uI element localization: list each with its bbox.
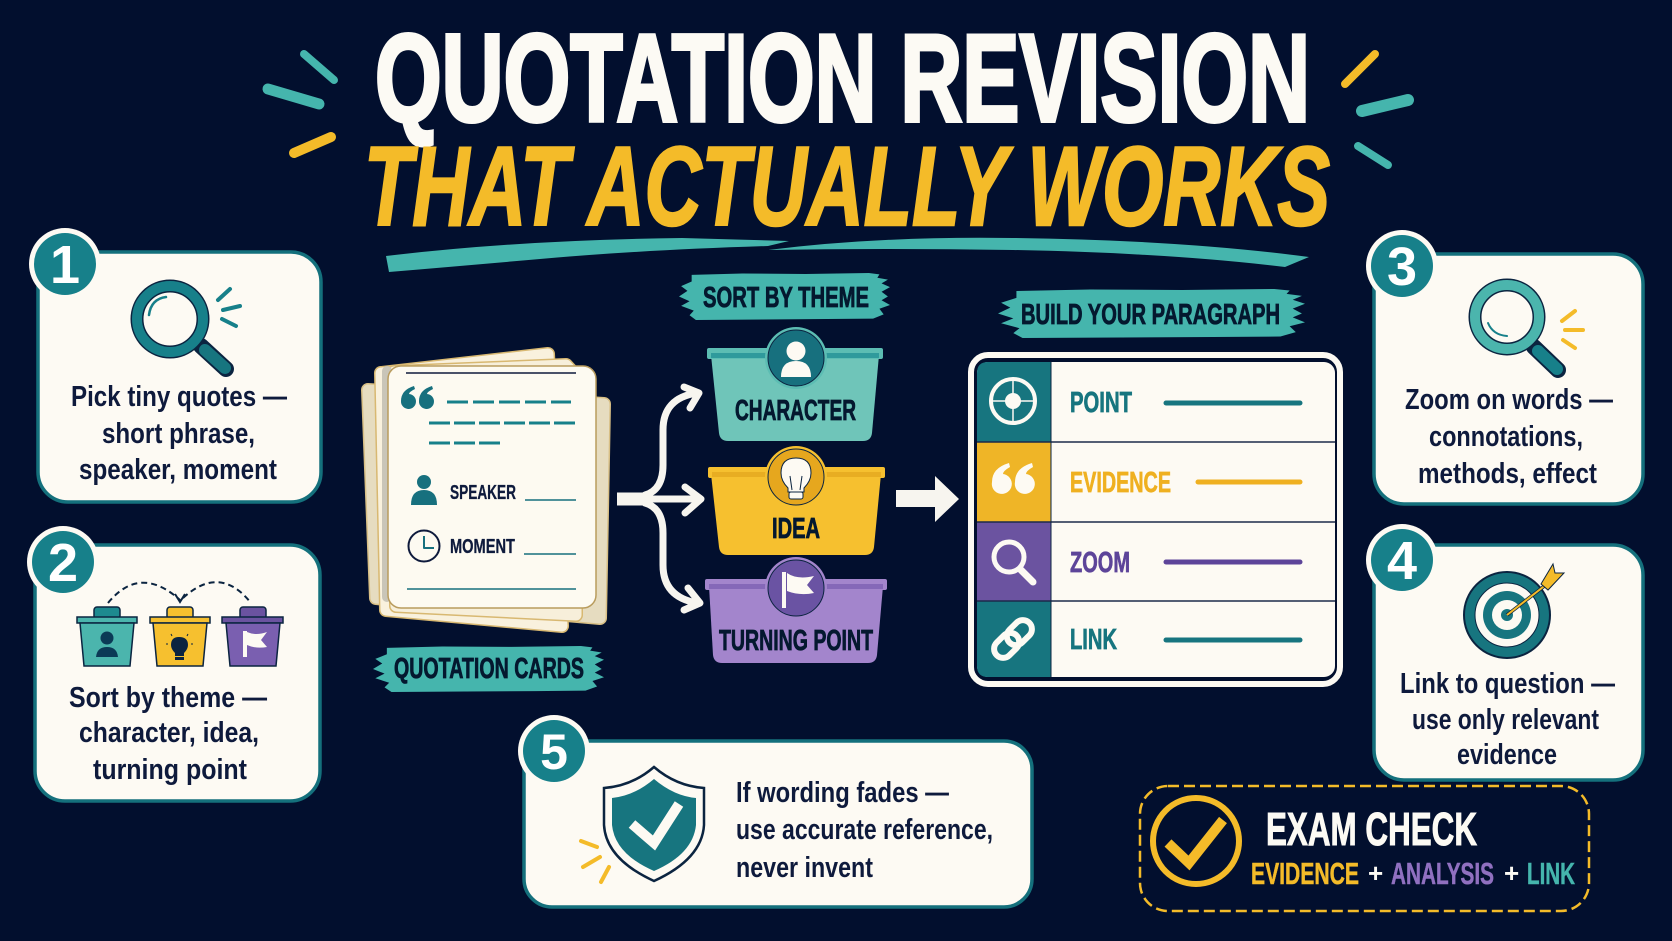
panel: step 1 bbox=[29, 228, 321, 502]
step 4 text: Link to question — bbox=[1400, 668, 1615, 700]
title bbox=[364, 10, 1330, 249]
speaker row bbox=[411, 475, 576, 505]
title underline swoosh bbox=[386, 238, 1309, 272]
row: link: LINK bbox=[1070, 624, 1117, 656]
exam formula: + bbox=[1504, 858, 1519, 888]
step 1 text bbox=[71, 381, 287, 486]
icon: zoom lens bbox=[994, 542, 1033, 582]
step 3 text: methods, effect bbox=[1418, 458, 1597, 490]
icon: target with arrow bbox=[1464, 564, 1564, 658]
moment row bbox=[408, 530, 576, 562]
callout: exam check: EXAM CHECK bbox=[1266, 803, 1477, 855]
exam formula: EVIDENCE bbox=[1251, 856, 1359, 891]
title accent marks bbox=[268, 54, 1408, 165]
badge 1: 1 bbox=[50, 235, 80, 295]
bin: turning point bbox=[705, 557, 887, 663]
label: quotation cards: QUOTATION CARDS bbox=[394, 653, 584, 685]
label: sort by theme: SORT BY THEME bbox=[703, 282, 869, 314]
row: evidence bbox=[977, 442, 1300, 522]
step 2 text: turning point bbox=[93, 754, 247, 786]
bin: idea bbox=[708, 446, 885, 555]
label: build your paragraph: BUILD YOUR PARAGRAPH bbox=[1021, 299, 1280, 331]
icon: chain link bbox=[990, 616, 1036, 662]
step 2 text: character, idea, bbox=[79, 717, 259, 749]
bin: idea: IDEA bbox=[772, 513, 820, 545]
icon: magnifying glass teal bbox=[1475, 285, 1583, 370]
step 4 text bbox=[1400, 668, 1615, 771]
row: point bbox=[977, 362, 1300, 442]
step 1 text: speaker, moment bbox=[79, 454, 277, 486]
exam formula bbox=[1251, 856, 1575, 891]
icon: crosshair bbox=[991, 379, 1035, 423]
row: zoom: ZOOM bbox=[1070, 547, 1130, 579]
badge 2: 2 bbox=[48, 533, 78, 593]
step 5 text: If wording fades — bbox=[736, 777, 949, 809]
badge 4: 4 bbox=[1387, 531, 1417, 591]
step 1 text: Pick tiny quotes — bbox=[71, 381, 287, 413]
row: link bbox=[977, 601, 1300, 677]
moment row: MOMENT bbox=[450, 536, 515, 558]
exam formula: LINK bbox=[1527, 856, 1575, 891]
exam formula: + bbox=[1368, 858, 1383, 888]
icon: quote marks bbox=[992, 463, 1035, 494]
row: evidence: EVIDENCE bbox=[1070, 467, 1171, 499]
panel: step 5 bbox=[518, 715, 1032, 907]
step 1 text: short phrase, bbox=[102, 418, 255, 450]
step 3 text: Zoom on words — bbox=[1405, 384, 1613, 416]
icon: flag badge bbox=[765, 557, 827, 619]
icon: light bulb badge bbox=[765, 446, 827, 508]
arrow: to paragraph bbox=[896, 476, 959, 522]
icon: shield with check bbox=[581, 767, 704, 882]
exam formula: ANALYSIS bbox=[1391, 856, 1494, 891]
step 2 text bbox=[69, 682, 267, 786]
icon: quote mark bbox=[401, 386, 434, 409]
icon: person badge bbox=[765, 327, 827, 389]
panel: step 4 bbox=[1366, 524, 1643, 780]
row: zoom bbox=[977, 522, 1300, 601]
step 2 text: Sort by theme — bbox=[69, 682, 267, 714]
icon: check circle bbox=[1153, 798, 1239, 884]
badge 3: 3 bbox=[1387, 237, 1417, 297]
badge 2 bbox=[27, 526, 99, 598]
badge 4 bbox=[1366, 524, 1438, 596]
step 5 text: never invent bbox=[736, 852, 873, 884]
step 4 text: use only relevant bbox=[1412, 704, 1599, 736]
badge 3 bbox=[1366, 230, 1438, 302]
placeholder dashes bbox=[429, 402, 575, 443]
step 3 text bbox=[1405, 384, 1613, 490]
bin: character: CHARACTER bbox=[735, 395, 856, 427]
step 5 text bbox=[736, 777, 993, 884]
step 5 text: use accurate reference, bbox=[736, 814, 993, 846]
panel: paragraph builder bbox=[971, 355, 1340, 684]
step 3 text: connotations, bbox=[1429, 421, 1583, 453]
speaker row: SPEAKER bbox=[450, 482, 516, 504]
label: build your paragraph bbox=[998, 289, 1305, 338]
bin: character bbox=[707, 327, 883, 441]
step 4 text: evidence bbox=[1457, 739, 1557, 771]
row: point: POINT bbox=[1070, 387, 1132, 419]
badge 5 bbox=[518, 715, 590, 787]
arrows: branching to bins bbox=[617, 387, 701, 610]
label: quotation cards bbox=[373, 646, 604, 692]
panel: step 2 bbox=[27, 526, 320, 801]
panel: quotation cards stack bbox=[368, 354, 604, 626]
badge 1 bbox=[29, 228, 101, 300]
icon: three sorting bins bbox=[77, 582, 283, 666]
label: sort by theme bbox=[679, 273, 890, 320]
callout: exam check bbox=[1140, 786, 1589, 911]
badge 5: 5 bbox=[540, 724, 568, 780]
bin: turning point: TURNING POINT bbox=[719, 625, 873, 657]
icon: magnifying glass bbox=[137, 286, 240, 369]
panel: step 3 bbox=[1366, 230, 1643, 504]
